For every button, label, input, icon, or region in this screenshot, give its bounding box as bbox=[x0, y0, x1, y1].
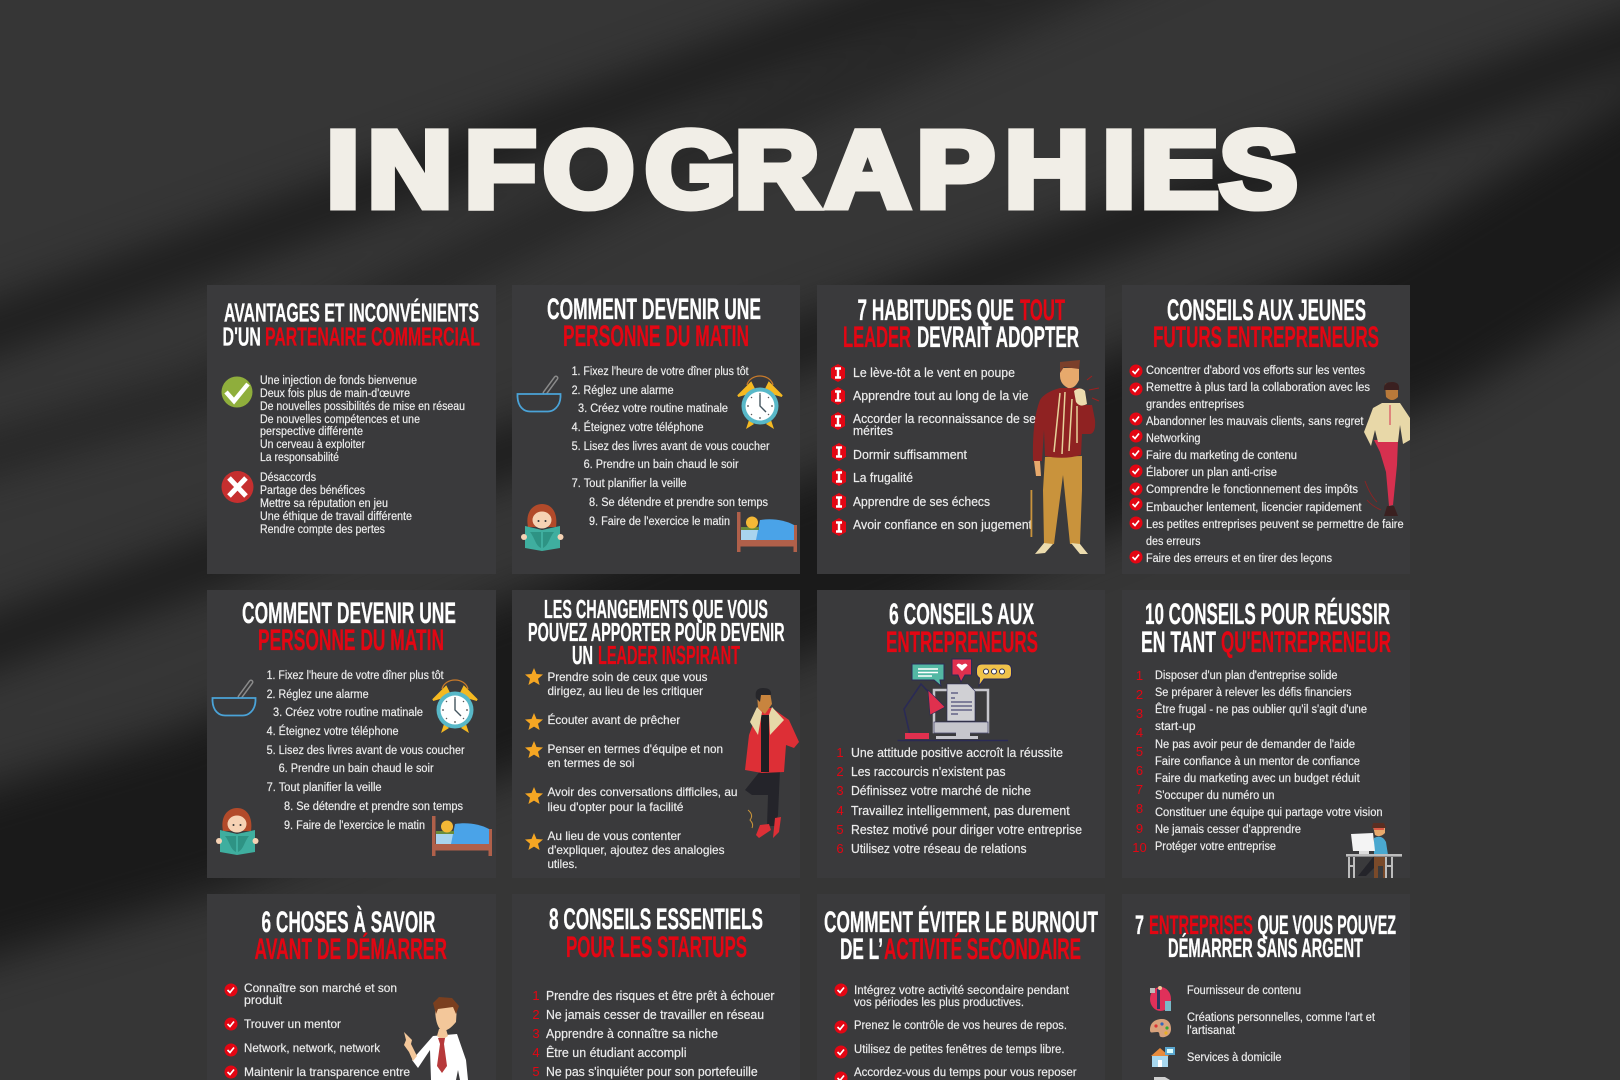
illustration: businessman thumbs up bbox=[404, 997, 468, 1080]
numbers bbox=[836, 745, 844, 856]
numbered list: 8. Se détendre et prendre son temps bbox=[284, 801, 463, 813]
numbers: 5 bbox=[1136, 744, 1143, 759]
list: avantages: La responsabilité bbox=[260, 452, 339, 464]
tips list: Constituer une équipe qui partage votre vision bbox=[1155, 807, 1383, 819]
list: avantages: Un cerveau à exploiter bbox=[260, 439, 365, 451]
list: inconvénients: Une éthique de travail différente bbox=[260, 511, 412, 523]
heading: DE L’ bbox=[840, 933, 883, 966]
numbered list: 1. Fixez l'heure de votre dîner plus tôt bbox=[572, 366, 749, 378]
list: Au lieu de vous contenter bbox=[548, 829, 681, 843]
tips list: Être un étudiant accompli bbox=[546, 1045, 686, 1060]
heading: COMMENT DEVENIR UNE bbox=[242, 597, 456, 630]
heading: TOUT bbox=[1020, 294, 1065, 327]
numbered list: 1. Fixez l'heure de votre dîner plus tôt bbox=[267, 670, 444, 682]
heading: UN bbox=[572, 640, 593, 670]
tips list: Faire confiance à un mentor de confiance bbox=[1155, 756, 1360, 768]
list: avantages: Deux fois plus de main-d'œuvre bbox=[260, 388, 410, 400]
tips list bbox=[1155, 670, 1383, 853]
list: inconvénients: Partage des bénéfices bbox=[260, 485, 365, 497]
tips list: Ne pas avoir peur de demander de l'aide bbox=[1155, 739, 1355, 751]
panel: 7 habitudes bbox=[817, 285, 1105, 574]
numbered list: 4. Éteignez votre téléphone bbox=[572, 421, 704, 434]
heading: POUVEZ APPORTER POUR DEVENIR bbox=[528, 617, 785, 647]
tips list: Protéger votre entreprise bbox=[1155, 841, 1276, 853]
tips list: Les petites entreprises peuvent se permettre de faire bbox=[1146, 519, 1404, 531]
heading: 6 CONSEILS AUX bbox=[889, 598, 1034, 631]
list: en termes de soi bbox=[548, 756, 634, 770]
panel: comment devenir une personne du matin (variante) bbox=[207, 590, 496, 878]
icon: palette bbox=[1150, 1019, 1171, 1037]
heading: PERSONNE DU MATIN bbox=[563, 320, 749, 353]
habits list: Le lève-tôt a le vent en poupe bbox=[853, 366, 1015, 380]
tips list: Comprendre le fonctionnement des impôts bbox=[1146, 484, 1358, 496]
heading: EN TANT bbox=[1141, 626, 1216, 659]
tips list: start-up bbox=[1155, 721, 1196, 733]
tips list: Faire du marketing de contenu bbox=[1146, 450, 1297, 462]
tips list: Se préparer à relever les défis financiers bbox=[1155, 687, 1352, 699]
heading: PARTENAIRE COMMERCIAL bbox=[265, 322, 480, 352]
tips list: Ne pas s'inquiéter pour son portefeuille bbox=[546, 1065, 758, 1079]
tips list: Apprendre à connaître sa niche bbox=[546, 1027, 718, 1041]
heading: 8 CONSEILS ESSENTIELS bbox=[549, 903, 763, 936]
icon: alarm clock bbox=[738, 376, 782, 429]
heading: CONSEILS AUX JEUNES bbox=[1167, 294, 1366, 327]
tips list: Abandonner les mauvais clients, sans regret bbox=[1146, 416, 1364, 428]
heading: ENTREPRISES bbox=[1149, 910, 1253, 940]
list: Penser en termes d'équipe et non bbox=[548, 742, 723, 756]
habits list: mérites bbox=[853, 424, 893, 438]
heading: FUTURS ENTREPRENEURS bbox=[1153, 321, 1379, 354]
numbers: 4 bbox=[532, 1045, 540, 1060]
tips list: Élaborer un plan anti-crise bbox=[1146, 466, 1277, 479]
illustration: desk with monitor, lamp and bubbles bbox=[898, 659, 1012, 740]
list: inconvénients bbox=[260, 472, 412, 536]
tips list: Networking bbox=[1146, 433, 1200, 445]
list: inconvénients: Désaccords bbox=[260, 472, 316, 484]
icon: partially visible grey item bbox=[1154, 1077, 1170, 1080]
tips list: Prendre des risques et être prêt à échouer bbox=[546, 989, 774, 1003]
numbers: 5 bbox=[836, 822, 844, 837]
numbers: 6 bbox=[836, 841, 844, 856]
tips list: S'occuper du numéro un bbox=[1155, 790, 1274, 802]
illustration: man in cream shirt and red trousers bbox=[1364, 382, 1410, 516]
tips list: Embaucher lentement, licencier rapidement bbox=[1146, 502, 1362, 514]
heading: 10 CONSEILS POUR RÉUSSIR bbox=[1145, 597, 1390, 631]
numbers: 3 bbox=[532, 1026, 540, 1041]
main title: INFOGRAPHIES bbox=[327, 109, 1297, 230]
numbered list: 5. Lisez des livres avant de vous coucher bbox=[572, 441, 770, 453]
icon: reading girl bbox=[521, 504, 564, 551]
list: Avoir des conversations difficiles, au bbox=[548, 785, 738, 799]
shield icons bbox=[831, 364, 846, 536]
panel: conseils aux jeunes futurs entrepreneurs bbox=[1122, 285, 1410, 574]
heading: 7 bbox=[1135, 910, 1144, 940]
list: avantages: De nouvelles compétences et une bbox=[260, 414, 420, 426]
numbers: 3 bbox=[1136, 706, 1143, 721]
heading: LEADER INSPIRANT bbox=[598, 640, 740, 670]
icon: bed bbox=[432, 816, 492, 856]
panel: 7 entreprises bbox=[1122, 894, 1410, 1080]
heading bbox=[254, 905, 447, 966]
list: Trouver un mentor bbox=[244, 1017, 341, 1031]
tips list bbox=[851, 746, 1082, 856]
tips list bbox=[546, 989, 774, 1079]
numbered list: 5. Lisez des livres avant de vous coucher bbox=[267, 745, 465, 757]
numbers: 2 bbox=[532, 1007, 540, 1022]
heading: AVANT DE DÉMARRER bbox=[254, 932, 447, 966]
numbers: 3 bbox=[836, 783, 844, 798]
numbers bbox=[532, 988, 540, 1079]
habits list: Apprendre tout au long de la vie bbox=[853, 389, 1029, 403]
numbers: 1 bbox=[532, 988, 540, 1003]
list: Intégrez votre activité secondaire pendant bbox=[854, 985, 1070, 997]
tips list: des erreurs bbox=[1146, 536, 1201, 548]
check icons bbox=[1130, 364, 1142, 564]
icon: alarm clock bbox=[433, 680, 477, 733]
numbered list: 7. Tout planifier la veille bbox=[572, 478, 687, 490]
heading: 6 CHOSES À SAVOIR bbox=[262, 905, 436, 939]
panel: 6 conseils aux entrepreneurs bbox=[817, 590, 1105, 878]
icon: red cross bbox=[222, 471, 254, 503]
heading: DEVRAIT ADOPTER bbox=[917, 321, 1079, 354]
tips list: Ne jamais cesser d'apprendre bbox=[1155, 824, 1301, 836]
panel: 6 choses à savoir bbox=[207, 894, 496, 1080]
heading bbox=[222, 298, 480, 352]
panel: 10 conseils pour réussir bbox=[1122, 590, 1410, 878]
numbered list: 3. Créez votre routine matinale bbox=[578, 403, 728, 415]
list: utiles. bbox=[548, 857, 578, 871]
list: d'expliquer, ajoutez des analogies bbox=[548, 843, 724, 857]
icon: bowl bbox=[518, 378, 560, 412]
list: Connaître son marché et son bbox=[244, 981, 397, 995]
check icons bbox=[224, 984, 238, 1078]
list: Utilisez de petites fenêtres de temps libre. bbox=[854, 1044, 1064, 1056]
tips list bbox=[1146, 365, 1404, 565]
list: Créations personnelles, comme l'art et bbox=[1187, 1012, 1376, 1024]
heading: QUE VOUS POUVEZ bbox=[1258, 910, 1396, 940]
heading bbox=[242, 597, 456, 657]
tips list: Travaillez intelligemment, pas durement bbox=[851, 804, 1070, 818]
panel: comment devenir une personne du matin bbox=[512, 285, 800, 574]
heading bbox=[547, 293, 761, 353]
tips list: Faire du marketing avec un budget réduit bbox=[1155, 773, 1360, 785]
list: Network, network, network bbox=[244, 1041, 381, 1055]
panel: 8 conseils essentiels bbox=[512, 894, 800, 1080]
tips list: Les raccourcis n'existent pas bbox=[851, 765, 1006, 779]
icon: bowl bbox=[212, 682, 256, 716]
icon: house bbox=[1151, 1047, 1175, 1067]
heading: COMMENT ÉVITER LE BURNOUT bbox=[824, 905, 1098, 939]
illustration: man in red sweater bbox=[1030, 360, 1099, 554]
numbered list bbox=[572, 366, 770, 528]
heading: 7 HABITUDES QUE bbox=[858, 294, 1014, 327]
numbers: 1 bbox=[836, 745, 844, 760]
numbered list: 2. Réglez une alarme bbox=[267, 689, 369, 701]
tips list: Utilisez votre réseau de relations bbox=[851, 842, 1026, 856]
heading: D'UN bbox=[222, 322, 261, 352]
list: vos périodes les plus productives. bbox=[854, 997, 1024, 1009]
numbers bbox=[1132, 668, 1147, 855]
numbers: 5 bbox=[532, 1064, 540, 1079]
list: avantages: perspective différente bbox=[260, 426, 363, 438]
tips list: Ne jamais cesser de travailler en réseau bbox=[546, 1008, 764, 1022]
heading: DÉMARRER SANS ARGENT bbox=[1168, 932, 1363, 963]
list: Prenez le contrôle de vos heures de repos. bbox=[854, 1020, 1067, 1032]
numbered list: 6. Prendre un bain chaud le soir bbox=[584, 459, 739, 471]
illustration: man in red coat bbox=[745, 688, 799, 838]
habits list: Dormir suffisamment bbox=[853, 448, 968, 462]
numbers: 8 bbox=[1136, 801, 1143, 816]
numbers: 4 bbox=[836, 803, 844, 818]
heading: AVANTAGES ET INCONVÉNIENTS bbox=[224, 298, 479, 328]
panel: comment éviter le burnout bbox=[817, 894, 1105, 1080]
habits list: Apprendre de ses échecs bbox=[853, 495, 990, 509]
list: l'artisanat bbox=[1187, 1025, 1236, 1037]
habits list: La frugalité bbox=[853, 471, 913, 485]
heading bbox=[528, 594, 785, 670]
heading: PERSONNE DU MATIN bbox=[258, 624, 444, 657]
heading: POUR LES STARTUPS bbox=[566, 931, 747, 964]
heading bbox=[1135, 910, 1396, 963]
tips list: Restez motivé pour diriger votre entreprise bbox=[851, 823, 1082, 837]
heading bbox=[1141, 597, 1391, 659]
icon: reading girl bbox=[216, 808, 258, 855]
list: Prendre soin de ceux que vous bbox=[548, 670, 708, 684]
heading bbox=[843, 294, 1079, 354]
heading bbox=[824, 905, 1098, 966]
tips list: Remettre à plus tard la collaboration avec les bbox=[1146, 382, 1370, 394]
list: lieu d'opter pour la facilité bbox=[548, 800, 684, 814]
panel: les changements bbox=[512, 590, 800, 878]
numbers: 9 bbox=[1136, 821, 1143, 836]
tips list: Concentrer d'abord vos efforts sur les ventes bbox=[1146, 365, 1365, 377]
list bbox=[1187, 985, 1376, 1064]
tips list: Être frugal - ne pas oublier qu'il s'agit d'une bbox=[1155, 703, 1367, 716]
list: Accordez-vous du temps pour vous reposer bbox=[854, 1067, 1077, 1079]
numbers: 6 bbox=[1136, 763, 1143, 778]
list: avantages: De nouvelles possibilités de mise en réseau bbox=[260, 401, 465, 413]
numbers: 2 bbox=[836, 764, 844, 779]
habits list bbox=[853, 366, 1036, 532]
list: Fournisseur de contenu bbox=[1187, 985, 1301, 997]
numbered list: 9. Faire de l'exercice le matin bbox=[284, 820, 425, 832]
list: avantages bbox=[260, 375, 465, 464]
icon: content creator bbox=[1150, 986, 1171, 1011]
heading: ENTREPRENEURS bbox=[886, 626, 1038, 659]
numbered list: 9. Faire de l'exercice le matin bbox=[589, 516, 730, 528]
numbers: 1 bbox=[1136, 668, 1143, 683]
numbered list: 8. Se détendre et prendre son temps bbox=[589, 497, 768, 509]
list: Maintenir la transparence entre bbox=[244, 1065, 410, 1079]
tips list: Disposer d'un plan d'entreprise solide bbox=[1155, 670, 1338, 682]
heading bbox=[1153, 294, 1379, 354]
tips list: Faire des erreurs et en tirer des leçons bbox=[1146, 553, 1332, 565]
illustration: man at desk bbox=[1346, 823, 1402, 878]
heading bbox=[549, 903, 763, 964]
numbered list: 3. Créez votre routine matinale bbox=[273, 707, 423, 719]
list bbox=[854, 985, 1077, 1079]
numbers: 10 bbox=[1132, 840, 1147, 855]
star icons bbox=[525, 668, 543, 850]
heading: QU'ENTREPRENEUR bbox=[1221, 626, 1391, 659]
heading: ACTIVITÉ SECONDAIRE bbox=[884, 932, 1081, 966]
tips list: Une attitude positive accroît la réussite bbox=[851, 746, 1063, 760]
numbered list: 7. Tout planifier la veille bbox=[267, 782, 382, 794]
numbered list: 2. Réglez une alarme bbox=[572, 385, 674, 397]
numbers: 2 bbox=[1136, 687, 1143, 702]
list: inconvénients: Rendre compte des pertes bbox=[260, 524, 385, 536]
list bbox=[548, 670, 738, 871]
habits list: Accorder la reconnaissance de se bbox=[853, 412, 1036, 426]
list: inconvénients: Mettre sa réputation en jeu bbox=[260, 498, 388, 510]
panel: avantages et inconvénients bbox=[207, 285, 496, 574]
habits list: Avoir confiance en son jugement bbox=[853, 518, 1033, 532]
icon: bed bbox=[737, 512, 797, 552]
numbered list: 4. Éteignez votre téléphone bbox=[267, 725, 399, 738]
list: produit bbox=[244, 993, 283, 1007]
numbered list: 6. Prendre un bain chaud le soir bbox=[279, 763, 434, 775]
list: Écouter avant de prêcher bbox=[548, 712, 680, 727]
list bbox=[244, 981, 410, 1079]
numbered list bbox=[267, 670, 465, 832]
list: dirigez, au lieu de les critiquer bbox=[548, 684, 703, 698]
icon: green check bbox=[222, 376, 252, 408]
heading: COMMENT DEVENIR UNE bbox=[547, 293, 761, 326]
heading bbox=[886, 598, 1038, 659]
list: Services à domicile bbox=[1187, 1052, 1282, 1064]
tips list: Définissez votre marché de niche bbox=[851, 784, 1031, 798]
check icons bbox=[834, 984, 848, 1080]
heading: LES CHANGEMENTS QUE VOUS bbox=[544, 594, 768, 624]
numbers: 4 bbox=[1136, 725, 1143, 740]
tips list: grandes entreprises bbox=[1146, 399, 1244, 411]
numbers: 7 bbox=[1136, 782, 1143, 797]
heading: LEADER bbox=[843, 321, 911, 354]
list: avantages: Une injection de fonds bienvenue bbox=[260, 375, 417, 387]
